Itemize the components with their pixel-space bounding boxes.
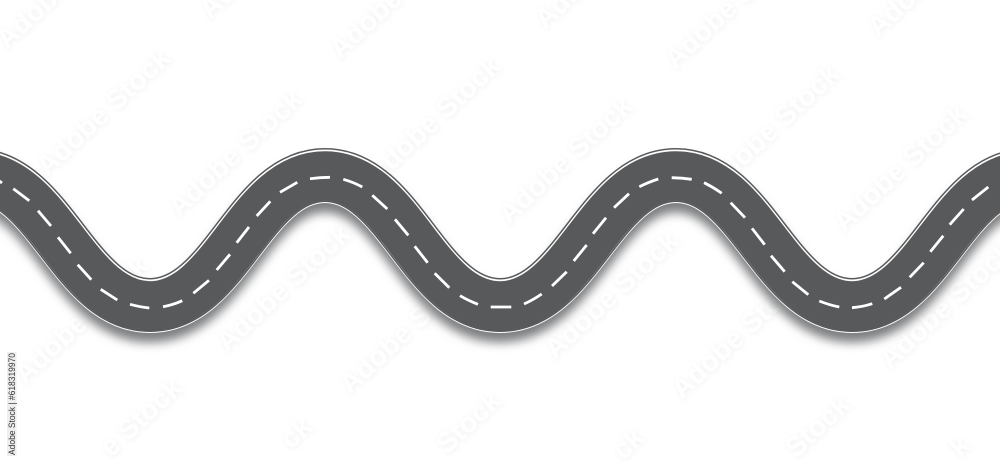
- stock id label: Adobe Stock | #618319970: [7, 353, 18, 455]
- watermark tiles: k: [943, 429, 976, 462]
- watermark tiles: Adobe Stock: [538, 225, 685, 364]
- watermark tiles: Adobe Stock: [699, 58, 846, 197]
- road shadow: [0, 186, 1000, 316]
- watermark tiles: e Stock: [94, 371, 188, 462]
- watermark tiles: Adobe Stock: [162, 83, 309, 222]
- watermark tiles: Stock: [779, 388, 856, 463]
- watermark tiles: Adobe Stock: [827, 98, 974, 237]
- watermark tiles: Adobe Stock: [333, 260, 480, 399]
- watermark tiles: Adobe Stock: [665, 265, 812, 404]
- watermark tiles: Stock: [430, 384, 507, 459]
- road centre dashed line: [0, 177, 988, 308]
- watermark tiles: Adobe Stock: [210, 218, 357, 357]
- watermark tiles: Adobe Stock: [8, 250, 155, 389]
- watermark tiles: Adobe Stock: [492, 90, 639, 229]
- watermark tiles: Adobe Stock: [360, 50, 507, 189]
- watermark tiles: Adobe Stock: [30, 42, 177, 181]
- road surface with edge lines: [0, 175, 1000, 306]
- watermark tiles: ck: [274, 410, 318, 454]
